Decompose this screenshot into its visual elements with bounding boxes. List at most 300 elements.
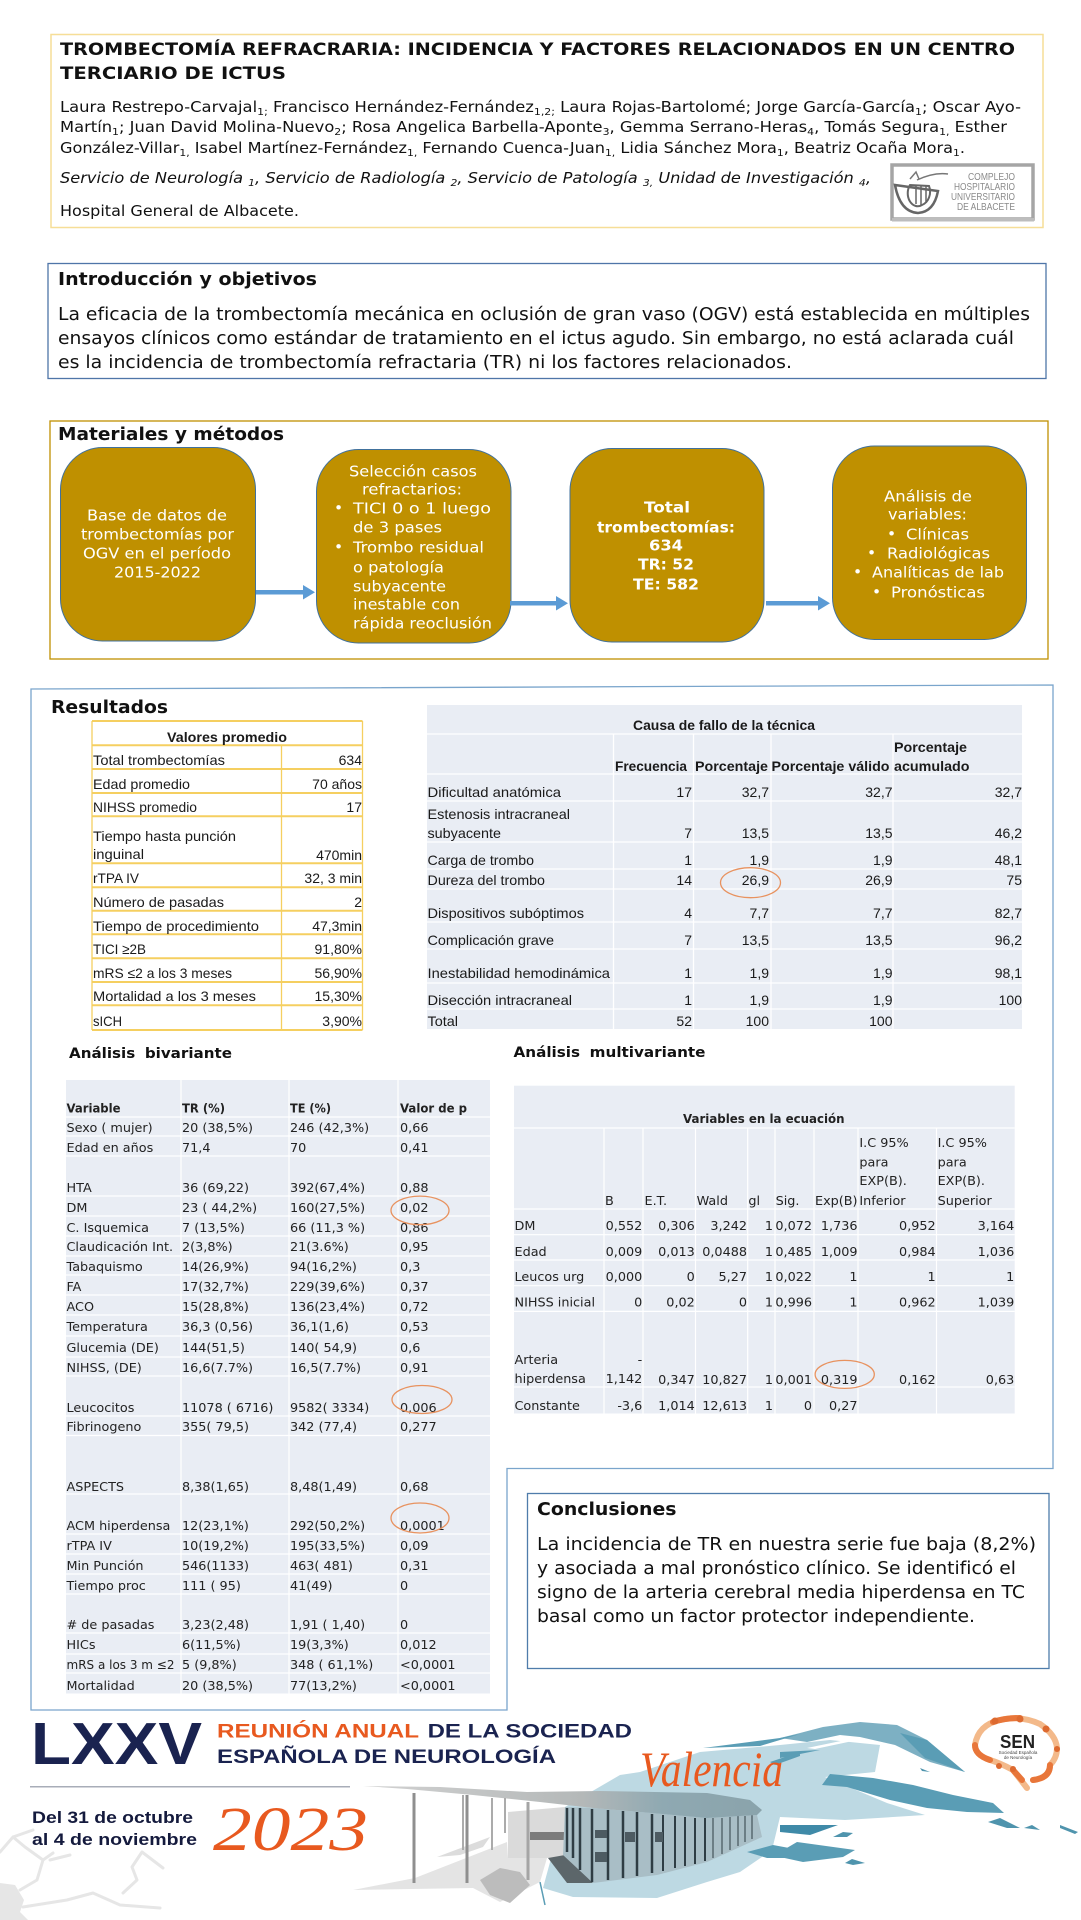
- heading: multivariate analysis: Análisis multivariante: [514, 1045, 706, 1061]
- affiliations: 3,: [643, 178, 653, 189]
- table: cause of technique failure: 13,5: [865, 825, 893, 841]
- table rows: 12(23,1%): [182, 1519, 249, 1534]
- flow box: case selection: rápida reoclusión: [353, 614, 492, 632]
- flow box: variables: [832, 446, 1026, 640]
- highlight circle: 26,9: [720, 868, 780, 898]
- table rows: 70: [290, 1141, 306, 1156]
- text: conclusions body: basal como un factor protector independiente.: [537, 1607, 975, 1627]
- table rows: 195(33,5%): [290, 1539, 365, 1554]
- table rows: 10,827: [702, 1373, 747, 1388]
- table: mean values: 470min: [316, 847, 362, 863]
- table rows: 15(28,8%): [182, 1300, 249, 1315]
- table rows: Constante: [514, 1399, 580, 1414]
- table rows: 0,009: [606, 1245, 642, 1260]
- table rows: Claudicación Int.: [66, 1240, 173, 1255]
- authors: Isabel Martínez-Fernández: [190, 139, 407, 157]
- table: cause of technique failure: Carga de trombo: [428, 852, 534, 868]
- table: mean values: mRS ≤2 a los 3 meses: [93, 965, 232, 981]
- table: cause of technique failure: 1,9: [873, 965, 893, 981]
- authors: 1,: [179, 148, 190, 159]
- authors: .: [960, 139, 965, 157]
- table title: Variables en la ecuación: [683, 1112, 844, 1127]
- table rows: 1: [765, 1399, 773, 1414]
- table rows: C. Isquemica: [66, 1221, 149, 1236]
- table rows: 14(26,9%): [182, 1260, 249, 1275]
- table rows: 0,41: [400, 1141, 428, 1156]
- table: mean values: rTPA IV: [93, 870, 140, 886]
- table: cause of technique failure: 1: [684, 965, 692, 981]
- flow box: database: [60, 448, 256, 641]
- flow box: database: OGV en el período: [83, 544, 231, 562]
- table: mean values: 2: [354, 894, 362, 910]
- authors: Esther: [949, 118, 1008, 136]
- table: cause of technique failure: subyacente: [428, 825, 501, 841]
- table rows: 94(16,2%): [290, 1260, 357, 1275]
- flow box: variables: Radiológicas: [887, 544, 990, 562]
- table rows: 0,319: [821, 1373, 858, 1388]
- table header: I.C 95%: [938, 1136, 987, 1151]
- table rows: 0: [400, 1618, 408, 1633]
- table: cause of technique failure: 1,9: [750, 852, 769, 868]
- table: mean values: [92, 721, 362, 1030]
- flow box: variables: Pronósticas: [891, 584, 985, 602]
- table: cause of technique failure: 82,7: [995, 905, 1022, 921]
- table rows: 342 (77,4): [290, 1420, 357, 1435]
- table rows: 1: [765, 1296, 773, 1310]
- table rows: 0: [739, 1296, 747, 1310]
- authors: 3: [603, 127, 610, 138]
- table rows: 3,23(2,48): [182, 1618, 249, 1633]
- table: cause of technique failure: Porcentaje válido: [772, 758, 890, 774]
- table rows: 0,91: [400, 1361, 428, 1376]
- table: multivariate analysis: [514, 1086, 1015, 1414]
- authors: Laura Restrepo-Carvajal: [60, 98, 241, 116]
- table rows: 1,039: [978, 1296, 1014, 1310]
- table rows: 1: [849, 1296, 858, 1310]
- table: cause of technique failure: 46,2: [995, 825, 1022, 841]
- table rows: 348 ( 61,1%): [290, 1658, 373, 1673]
- flow box: variables: Clínicas: [906, 526, 969, 544]
- arrow: [766, 596, 830, 610]
- heading: conclusions: Conclusiones: [537, 1500, 676, 1520]
- table: cause of technique failure: acumulado: [894, 758, 970, 774]
- authors: 1: [777, 148, 784, 159]
- table rows: 11078 ( 6716): [182, 1401, 273, 1416]
- table: mean values: 91,80%: [315, 941, 362, 957]
- table rows: 0,006: [400, 1401, 437, 1416]
- flow box: totals: Total: [644, 498, 690, 516]
- authors: 1,2;: [534, 107, 555, 118]
- table rows: DM: [66, 1201, 87, 1216]
- text: dates: [32, 1809, 197, 1849]
- authors: González-Villar: [60, 139, 171, 157]
- table: cause of technique failure: 13,5: [865, 932, 893, 948]
- table rows: 0,552: [606, 1219, 642, 1234]
- table header: TR (%): [182, 1102, 225, 1116]
- flow box: totals: TE: 582: [633, 576, 699, 594]
- table: cause of technique failure: 26,9: [865, 872, 893, 888]
- table rows: 392(67,4%): [290, 1181, 365, 1196]
- logo: hospital: [892, 165, 1034, 222]
- table rows: hiperdensa: [514, 1372, 586, 1387]
- heading: congress name: [217, 1718, 632, 1768]
- table: mean values: 15,30%: [315, 988, 362, 1004]
- logo: hospital: UNIVERSITARIO: [951, 191, 1015, 203]
- table: cause of technique failure: 17: [676, 784, 692, 800]
- table rows: 1,142: [606, 1372, 642, 1387]
- heading: materials: Materiales y métodos: [58, 425, 284, 445]
- table rows: 246 (42,3%): [290, 1121, 369, 1136]
- highlight circles: significant p values: [391, 1196, 452, 1533]
- table rows: 16,5(7.7%): [290, 1361, 361, 1376]
- heading: congress name: DE LA SOCIEDAD: [428, 1720, 632, 1742]
- table rows: 16,6(7.7%): [182, 1361, 253, 1376]
- table: cause of technique failure: 48,1: [995, 852, 1022, 868]
- table: mean values: NIHSS promedio: [93, 799, 197, 815]
- table header: Valor de p: [400, 1102, 467, 1116]
- table rows: 6(11,5%): [182, 1638, 241, 1653]
- table header: Variable: [66, 1102, 121, 1116]
- logo: SEN: Sociedad Española: [999, 1750, 1038, 1755]
- table rows: 0,88: [400, 1181, 428, 1196]
- table rows: 0,001: [775, 1373, 812, 1388]
- table rows: 7 (13,5%): [182, 1221, 245, 1236]
- table: mean values: 17: [346, 799, 362, 815]
- authors: 1,: [407, 148, 417, 159]
- table: cause of technique failure: 32,7: [742, 784, 769, 800]
- authors: Lidia Sánchez Mora: [615, 139, 777, 157]
- panel: conclusions: [528, 1494, 1049, 1668]
- table rows: Arteria: [514, 1353, 558, 1368]
- table rows: 5 (9,8%): [182, 1658, 237, 1673]
- table rows: NIHSS, (DE): [66, 1361, 142, 1376]
- table rows: -: [638, 1353, 642, 1368]
- table header: E.T.: [644, 1194, 667, 1209]
- table rows: 0,95: [400, 1240, 428, 1255]
- authors: 1: [953, 148, 960, 159]
- table: mean values: Tiempo hasta punción: [93, 828, 236, 844]
- table rows: 0,37: [400, 1280, 428, 1295]
- authors: ; Oscar Ayo-: [922, 98, 1021, 116]
- table: cause of technique failure: Porcentaje: [894, 739, 967, 755]
- table: cause of technique failure: 4: [684, 905, 692, 921]
- table rows: # de pasadas: [66, 1618, 155, 1633]
- table: mean values: Número de pasadas: [93, 894, 224, 910]
- table header: gl: [748, 1194, 760, 1209]
- table: cause of technique failure: Estenosis intracraneal: [428, 806, 570, 822]
- flow box: case selection: refractarios:: [362, 480, 462, 498]
- table rows: Tiempo proc: [66, 1579, 146, 1594]
- authors: ; Juan David Molina-Nuevo: [119, 118, 334, 136]
- table: mean values: inguinal: [93, 846, 144, 862]
- table header: [66, 1102, 467, 1116]
- authors: , Gemma Serrano-Heras: [610, 118, 807, 136]
- table rows: 12,613: [702, 1399, 747, 1414]
- table rows: 0,66: [400, 1121, 428, 1136]
- table rows: 0,3: [400, 1260, 420, 1275]
- table rows: 71,4: [182, 1141, 210, 1156]
- flow box: totals: TR: 52: [638, 556, 694, 574]
- table: cause of technique failure: Causa de fallo de la técnica: [633, 717, 815, 733]
- table rows: 0: [400, 1579, 408, 1594]
- table rows: Edad en años: [66, 1141, 154, 1156]
- table rows: 1,014: [658, 1399, 695, 1414]
- table rows: FA: [66, 1280, 82, 1295]
- table rows: 0,68: [400, 1480, 428, 1495]
- table: cause of technique failure: Total: [428, 1013, 458, 1029]
- table rows: 41(49): [290, 1579, 333, 1594]
- highlight circle: 0,319: [815, 1360, 874, 1388]
- table rows: HICs: [66, 1638, 96, 1653]
- illustration: building: [353, 1786, 762, 1903]
- decoration: grey brain veins: [0, 1830, 163, 1920]
- table rows: 0,012: [400, 1638, 437, 1653]
- panel: introduction and objectives: [48, 264, 1046, 378]
- table: cause of technique failure: 100: [746, 1013, 769, 1029]
- table rows: 3,164: [978, 1219, 1014, 1234]
- table rows: 0,63: [986, 1373, 1014, 1388]
- table: cause of technique failure: 7,7: [750, 905, 769, 921]
- table: cause of technique failure: 100: [999, 992, 1022, 1008]
- table rows: 1,009: [821, 1245, 858, 1260]
- table: cause of technique failure: 96,2: [995, 932, 1022, 948]
- table: mean values: 3,90%: [322, 1013, 362, 1029]
- table: cause of technique failure: 7: [684, 825, 692, 841]
- text: introduction body: ensayos clínicos como estándar de tratamiento en el ictus agudo. Sin embargo, no está aclarada cuál: [58, 329, 1014, 349]
- authors: 1;: [257, 107, 268, 118]
- panel: results frame: [31, 685, 1053, 1710]
- flow box: variables: •: [867, 544, 876, 562]
- table: cause of technique failure: Frecuencia: [615, 758, 687, 774]
- table rows: -3,6: [617, 1399, 642, 1414]
- table rows: 355( 79,5): [182, 1420, 249, 1435]
- table: cause of technique failure: Dispositivos subóptimos: [428, 905, 584, 921]
- flow box: case selection: subyacente: [353, 578, 446, 596]
- heading: bivariate analysis: Análisis bivariante: [69, 1046, 232, 1062]
- title: [60, 38, 1015, 84]
- affiliations: [60, 169, 871, 220]
- table rows: 0,984: [899, 1245, 936, 1260]
- flow box: variables: Analíticas de lab: [872, 564, 1004, 582]
- panel: materials and methods: [50, 421, 1048, 659]
- table rows: 8,38(1,65): [182, 1480, 249, 1495]
- table: mean values: Valores promedio: [167, 729, 287, 745]
- text: conclusions body: signo de la arteria cerebral media hiperdensa en TC: [537, 1583, 1025, 1603]
- table header: EXP(B).: [859, 1174, 907, 1189]
- table rows: Leucocitos: [66, 1401, 135, 1416]
- logo: hospital: HOSPITALARIO: [954, 181, 1015, 193]
- table: cause of technique failure: 1,9: [750, 965, 769, 981]
- table rows: 20 (38,5%): [182, 1679, 253, 1694]
- table header: Inferior: [859, 1194, 906, 1209]
- table: cause of technique failure: Disección intracraneal: [428, 992, 572, 1008]
- flow box: variables: Análisis de: [884, 488, 972, 506]
- authors: Fernando Cuenca-Juan: [417, 139, 605, 157]
- table rows: 0,0001: [400, 1519, 445, 1534]
- table rows: 0,53: [400, 1320, 428, 1335]
- table rows: 0,306: [658, 1219, 695, 1234]
- table rows: [514, 1219, 1014, 1414]
- table rows: 546(1133): [182, 1559, 249, 1574]
- affiliations: Hospital General de Albacete.: [60, 202, 299, 220]
- table rows: Fibrinogeno: [66, 1420, 141, 1435]
- flow box: case selection: [316, 450, 511, 643]
- table rows: 0,02: [400, 1201, 428, 1216]
- table: mean values: 56,90%: [315, 965, 362, 981]
- authors: ; Rosa Angelica Barbella-Aponte: [341, 118, 603, 136]
- authors: 2: [334, 127, 341, 138]
- authors: 1: [112, 127, 119, 138]
- logo: hospital: COMPLEJO: [968, 171, 1015, 183]
- table rows: 1,736: [821, 1219, 858, 1234]
- table rows: 0,31: [400, 1559, 428, 1574]
- table rows: 5,27: [718, 1270, 747, 1285]
- table rows: 0,013: [658, 1245, 695, 1260]
- table rows: 66 (11,3 %): [290, 1221, 365, 1236]
- table rows: 0,277: [400, 1420, 437, 1435]
- flow box: database: 2015-2022: [114, 564, 201, 582]
- table: mean values: TICI ≥2B: [93, 941, 146, 957]
- table rows: 144(51,5): [182, 1341, 245, 1356]
- table rows: Mortalidad: [66, 1679, 135, 1694]
- table rows: rTPA IV: [66, 1539, 112, 1554]
- table rows: Glucemia (DE): [66, 1341, 159, 1356]
- illustration: watercolor: [540, 1722, 1078, 1905]
- table rows: 0: [804, 1399, 812, 1414]
- table rows: 0,86: [400, 1221, 428, 1236]
- table rows: 0,02: [666, 1296, 695, 1310]
- table: cause of technique failure: 1,9: [873, 852, 893, 868]
- flow box: variables: variables:: [888, 506, 967, 524]
- table: mean values: Total trombectomías: [93, 752, 225, 768]
- heading: congress name: ESPAÑOLA DE NEUROLOGÍA: [217, 1745, 556, 1768]
- table rows: 36,1(1,6): [290, 1320, 349, 1335]
- table rows: 292(50,2%): [290, 1519, 365, 1534]
- authors: 4: [807, 127, 814, 138]
- arrow: [256, 585, 315, 600]
- table: mean values: Tiempo de procedimiento: [93, 918, 259, 934]
- authors: 1,: [939, 127, 949, 138]
- table rows: Min Punción: [66, 1559, 144, 1574]
- heading: LXXV: LXXV: [31, 1711, 202, 1777]
- text: 2023: 2023: [213, 1796, 368, 1864]
- logo: hospital: DE ALBACETE: [957, 201, 1015, 213]
- table rows: HTA: [66, 1181, 92, 1196]
- table rows: 0,347: [658, 1373, 695, 1388]
- table header: para: [859, 1156, 888, 1170]
- table rows: 0,09: [400, 1539, 428, 1554]
- table rows: 1: [765, 1373, 773, 1388]
- table: cause of technique failure: Dureza del trombo: [428, 872, 545, 888]
- text: introduction body: La eficacia de la trombectomía mecánica en oclusión de gran vaso (OGV) está establecida en múltiples: [58, 305, 1030, 325]
- text: conclusions body: La incidencia de TR en nuestra serie fue baja (8,2%): [537, 1535, 1036, 1555]
- table: cause of technique failure: 7: [684, 932, 692, 948]
- affiliations: ,: [866, 169, 871, 187]
- table rows: 0,952: [899, 1219, 936, 1234]
- table header: para: [938, 1156, 967, 1170]
- title: TERCIARIO DE ICTUS: [60, 64, 286, 84]
- table rows: 1: [765, 1245, 773, 1260]
- table: mean values: 634: [339, 752, 362, 768]
- table rows: 136(23,4%): [290, 1300, 365, 1315]
- table rows: 21(3.6%): [290, 1240, 349, 1255]
- affiliations: , Servicio de Radiología: [255, 169, 450, 187]
- table rows: 10(19,2%): [182, 1539, 249, 1554]
- table: mean values: Mortalidad a los 3 meses: [93, 988, 256, 1004]
- flow box: case selection: de 3 pases: [353, 518, 442, 536]
- affiliations: , Servicio de Patología: [457, 169, 643, 187]
- table rows: 20 (38,5%): [182, 1121, 253, 1136]
- table: cause of technique failure: 98,1: [995, 965, 1022, 981]
- table rows: ASPECTS: [66, 1480, 124, 1495]
- table rows: 0,022: [775, 1270, 812, 1285]
- flow box: case selection: o patología: [353, 558, 444, 576]
- table rows: 0,072: [775, 1219, 812, 1234]
- table rows: 8,48(1,49): [290, 1480, 357, 1495]
- affiliations: 1: [248, 178, 255, 189]
- table rows: 1,036: [978, 1245, 1014, 1260]
- table: cause of technique failure: 75: [1006, 872, 1022, 888]
- text: dates: Del 31 de octubre: [32, 1809, 193, 1827]
- table header: B: [605, 1194, 614, 1209]
- table rows: 111 ( 95): [182, 1579, 241, 1594]
- table: cause of technique failure: 32,7: [865, 784, 893, 800]
- table header: TE (%): [290, 1102, 331, 1116]
- footer: congress banner: [0, 1711, 1078, 1920]
- table rows: 1: [1006, 1270, 1014, 1285]
- authors: , Tomás Segura: [814, 118, 939, 136]
- flow box: case selection: inestable con: [353, 596, 460, 614]
- table: cause of technique failure: Complicación grave: [428, 932, 554, 948]
- table rows: ACM hiperdensa: [66, 1519, 170, 1534]
- table header: Sig.: [776, 1194, 799, 1209]
- arrow: [510, 596, 568, 610]
- table rows: 0,485: [775, 1245, 812, 1260]
- flow box: totals: trombectomías:: [597, 518, 735, 536]
- flow box: database: Base de datos de: [87, 506, 227, 524]
- table header: Superior: [938, 1194, 992, 1209]
- table rows: 0,162: [899, 1373, 936, 1388]
- text: introduction body: es la incidencia de trombectomía refractaria (TR) ni los factores relacionados.: [58, 353, 792, 373]
- heading: introduction: Introducción y objetivos: [58, 270, 317, 290]
- authors: Francisco Hernández-Fernández: [268, 98, 534, 116]
- table rows: 463( 481): [290, 1559, 353, 1574]
- logo: SEN: [975, 1716, 1060, 1788]
- table rows: 0: [687, 1270, 695, 1285]
- table: mean values: 70 años: [312, 776, 362, 792]
- table: cause of technique failure: 1: [684, 992, 692, 1008]
- flow box: case selection: •: [334, 538, 343, 556]
- flow box: case selection: •: [334, 499, 343, 517]
- flow box: case selection: Trombo residual: [352, 538, 484, 556]
- table rows: 140( 54,9): [290, 1341, 357, 1356]
- authors: 1: [915, 107, 922, 118]
- table rows: ACO: [66, 1300, 94, 1315]
- table header: [605, 1136, 992, 1209]
- title: TROMBECTOMÍA REFRACRARIA: INCIDENCIA Y FACTORES RELACIONADOS EN UN CENTRO: [60, 38, 1015, 60]
- table rows: 0: [634, 1296, 642, 1310]
- table rows: 2(3,8%): [182, 1240, 233, 1255]
- table rows: NIHSS inicial: [514, 1296, 595, 1310]
- table: cause of technique failure: 1,9: [873, 992, 893, 1008]
- affiliations: Servicio de Neurología: [60, 169, 229, 187]
- table: cause of technique failure: 26,9: [742, 872, 769, 888]
- table: cause of technique failure: Dificultad anatómica: [428, 784, 561, 800]
- table rows: 0,6: [400, 1341, 420, 1356]
- text: Valencia: Valencia: [640, 1741, 783, 1797]
- table rows: mRS a los 3 m ≤2: [66, 1658, 174, 1673]
- table header: EXP(B).: [938, 1174, 985, 1189]
